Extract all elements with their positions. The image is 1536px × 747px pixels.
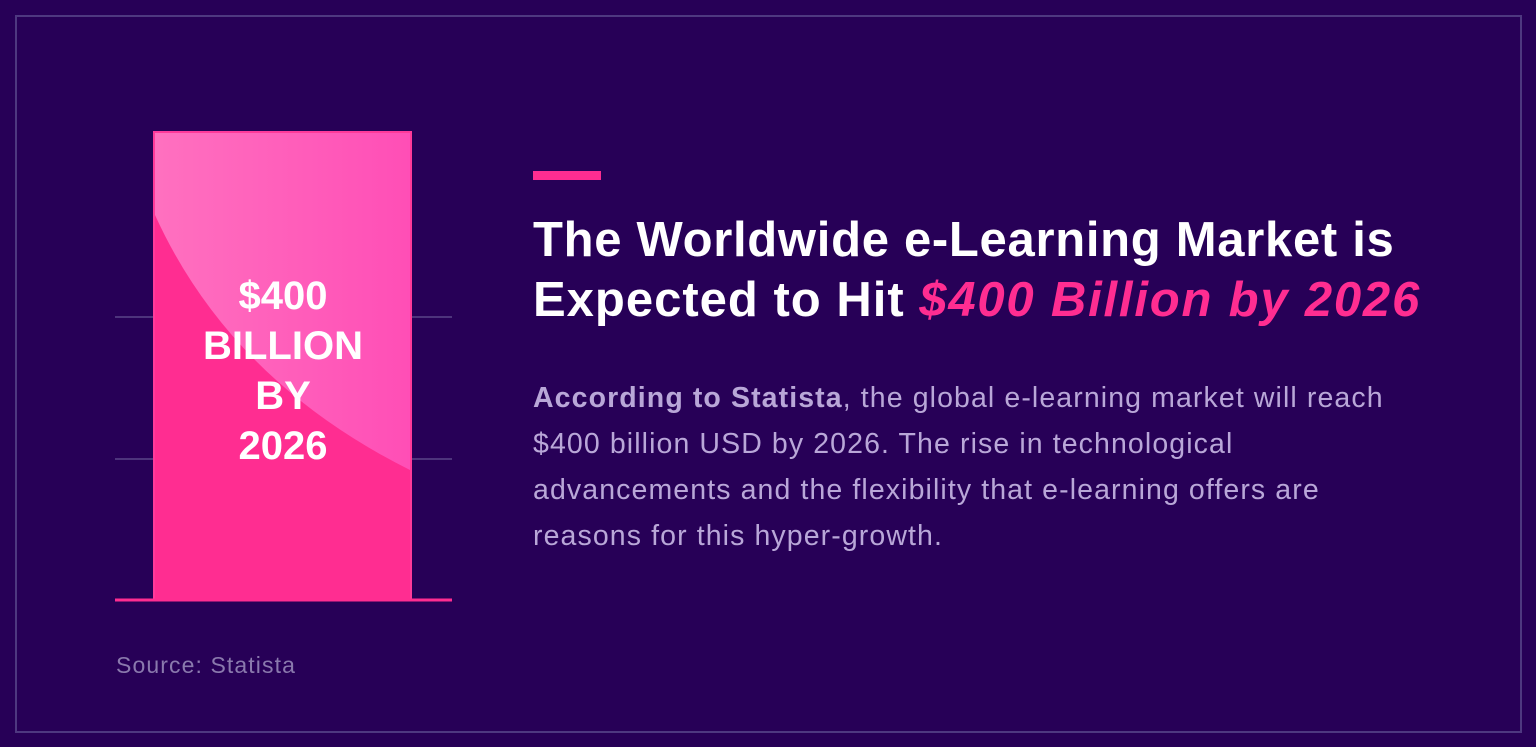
bar chart xyxy=(115,131,452,602)
title xyxy=(533,213,1421,327)
title: The Worldwide e-Learning Market is xyxy=(533,213,1394,267)
bar label xyxy=(203,274,363,468)
bar label: BILLION xyxy=(203,324,363,368)
body text xyxy=(533,382,1384,552)
source: Source: Statista xyxy=(116,652,296,678)
body text: advancements and the flexibility that e-learning offers are xyxy=(533,474,1320,506)
bar label: $400 xyxy=(239,274,327,318)
body text: According to Statista, the global e-learning market will reach xyxy=(533,382,1384,414)
body text: reasons for this hyper-growth. xyxy=(533,520,943,552)
bar label: 2026 xyxy=(239,424,327,468)
title: Expected to Hit $400 Billion by 2026 xyxy=(533,273,1421,327)
body text: $400 billion USD by 2026. The rise in technological xyxy=(533,428,1233,460)
accent dash xyxy=(533,171,601,180)
bar label: BY xyxy=(255,374,311,418)
